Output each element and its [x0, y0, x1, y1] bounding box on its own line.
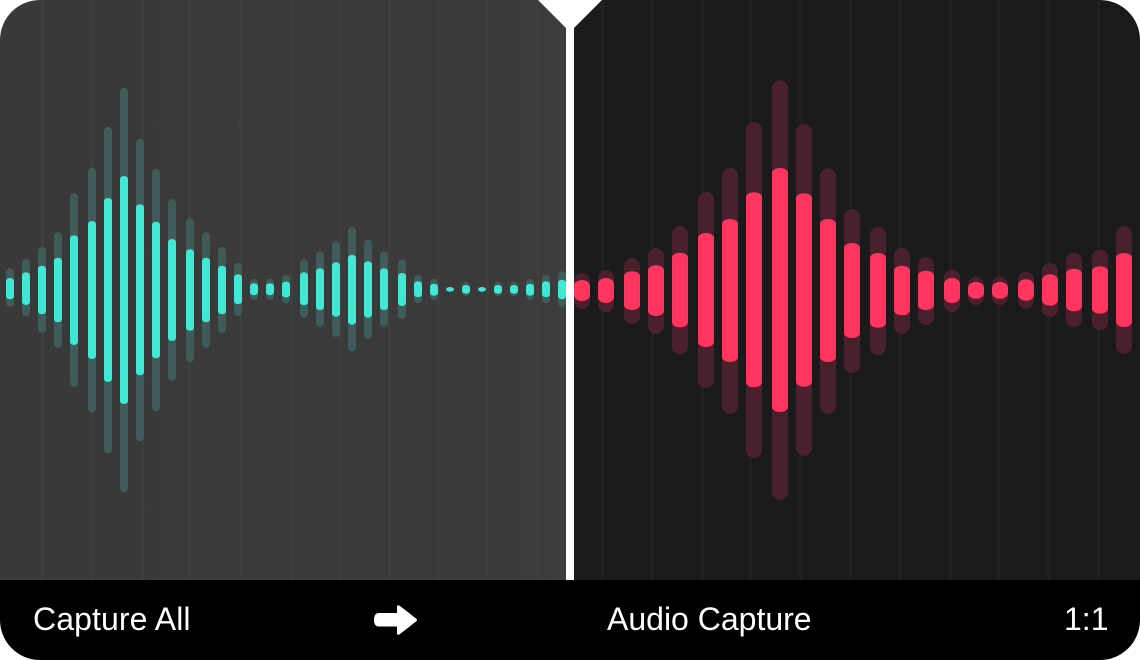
label: capture all: Capture All	[33, 601, 191, 637]
bottom label bar	[0, 580, 1140, 660]
label: audio capture: Audio Capture	[607, 601, 812, 637]
waveform: pink inner levels	[574, 168, 1132, 412]
icon: arrow	[374, 605, 417, 635]
panel: audio capture	[574, 0, 1140, 580]
waveform: teal outer levels	[6, 88, 566, 492]
waveform: pink outer levels	[574, 80, 1132, 500]
panel: capture all	[0, 0, 566, 580]
label: ratio: 1:1	[1064, 601, 1108, 637]
waveform: teal inner levels	[6, 176, 566, 404]
